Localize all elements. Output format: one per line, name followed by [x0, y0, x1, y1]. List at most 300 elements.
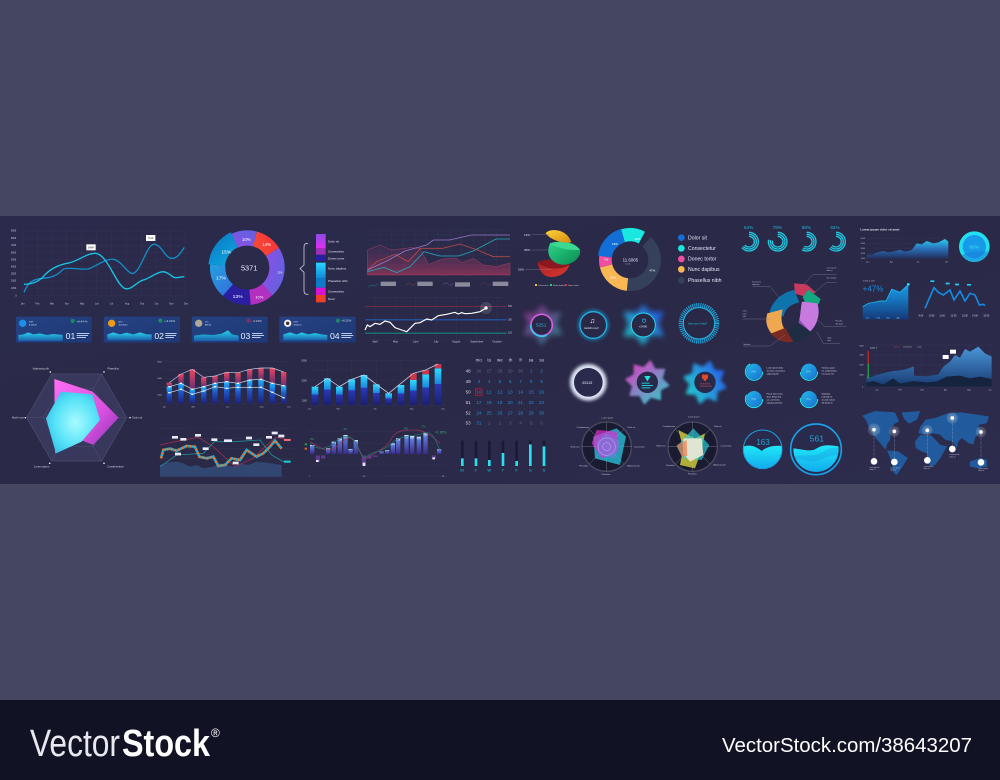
round widget 63115: 63115 [582, 381, 592, 385]
3D ring chart: tortor [743, 312, 747, 315]
info circle 3: diam. Etiam duis [767, 396, 781, 399]
round widget 63115 [570, 364, 607, 401]
line chart with two curves: 7000 [11, 245, 17, 247]
dense area chart: 5000 [859, 365, 865, 367]
donut chart 11.6005: 7% [604, 257, 608, 261]
bar and line mixed chart: 8% [404, 426, 408, 430]
map markers: dolor sit [890, 469, 897, 472]
water gauge 163: 163 [756, 438, 770, 447]
calendar: 31 [476, 421, 482, 426]
map markers: Lorem ipsum [950, 454, 960, 456]
calendar: 26 [476, 368, 482, 373]
round widget music: ♫ [590, 316, 595, 325]
calendar: 30 [518, 368, 523, 373]
3D ring chart: Consectetur [752, 281, 761, 284]
peaks line chart: 10:00 [929, 315, 935, 317]
card 01 XRP: 01 [66, 331, 75, 341]
card 04 ETH [279, 317, 356, 343]
dense area chart: 0 [862, 387, 864, 389]
3D ring chart: Phasellus [835, 321, 843, 323]
calendar: 29 [529, 410, 534, 415]
water gauge 561: 561 [810, 434, 824, 444]
3D sphere pie: Consectetur [538, 284, 549, 287]
dashboard band [0, 216, 1000, 484]
line chart with two curves: 5484 [88, 245, 94, 249]
bar chart blue with line: 5000 [302, 380, 308, 382]
panel: lower right charts [859, 345, 992, 391]
stacked bar chart red and blue [157, 361, 291, 409]
bar chart blue with line: Jan [308, 409, 311, 411]
peaks line chart: 12:00 [951, 315, 957, 317]
radar wheel 1 [571, 417, 645, 476]
card 01 XRP: $ 338.40 [29, 324, 38, 326]
star widget shield [678, 355, 732, 410]
info circle 4 [800, 390, 835, 408]
card 04 ETH: +6.11% [341, 319, 352, 323]
calendar: 25 [487, 410, 492, 415]
dense area chart: +103% [893, 347, 899, 349]
3D sphere pie: Donec tortor [568, 284, 579, 287]
calendar: fr [519, 358, 523, 363]
weekly bar chart: M [460, 468, 464, 473]
info circle 4: Sed porta [822, 393, 831, 396]
white price line chart: June [413, 340, 419, 344]
info circle 4: euismod mi, [822, 397, 833, 399]
calendar: 51 [466, 400, 471, 405]
donut chart 11.6005: 12% [634, 237, 641, 241]
round widget 5251: 5251 [536, 323, 547, 328]
map markers [868, 412, 989, 472]
footer bar [0, 700, 1000, 780]
donut chart 5371 [205, 226, 289, 310]
calendar: 3 [478, 379, 481, 384]
3D ring chart: nibh quam [835, 323, 844, 325]
bar and line mixed chart: 7% [422, 425, 426, 429]
hexagon radar chart: Lorem ipsum [34, 464, 50, 468]
info circle 2: Vivamus quam [822, 368, 835, 370]
calendar: 10 [476, 390, 482, 395]
bar and line mixed chart: 10 [363, 476, 366, 478]
area chart with title: Jul [917, 262, 920, 264]
bar chart blue with line [302, 360, 445, 411]
continents [862, 411, 989, 475]
line chart with two curves: 9000 [11, 231, 17, 233]
line chart with two curves: Dec [184, 304, 189, 306]
info circle 4: 71% [806, 399, 811, 401]
map markers: Lorem ipsum [924, 466, 934, 468]
calendar: 1 [530, 368, 533, 373]
info circle 3: Fusce vitae varius [767, 393, 783, 396]
card 01 XRP [16, 317, 92, 343]
donut chart 5371: 5371 [241, 264, 257, 273]
radar wheel 1: Phasellus [602, 474, 610, 476]
calendar: mo [476, 358, 482, 363]
3D sphere pie: Morbi dapibus [553, 284, 565, 287]
map markers: dolor sit [870, 468, 876, 471]
area chart with title: 5000 [861, 238, 866, 240]
line chart with two curves: Aug [125, 303, 130, 306]
donut chart 11.6005: 23% [610, 275, 616, 279]
round widget music [578, 309, 609, 341]
hexagon radar chart: Morbi non [12, 415, 24, 419]
calendar: we [497, 358, 503, 363]
calendar: su [539, 358, 545, 363]
calendar: 5 [499, 379, 502, 384]
hexagon radar chart: Adipiscing elit [33, 367, 49, 371]
bar chart blue with line: 1000 [302, 400, 308, 402]
calendar: tu [487, 358, 492, 363]
dense area chart: Dollar ▾ [870, 346, 877, 349]
percentage ring 64 [740, 225, 758, 251]
legend with bracket: Consectetur [328, 250, 344, 254]
white price line chart: July [434, 340, 439, 344]
calendar: 15 [529, 390, 534, 395]
line chart with two curves: 5000 [11, 259, 17, 261]
peaks line chart: 13:00 [962, 315, 969, 317]
calendar: 13 [508, 390, 513, 395]
3D ring chart: Donec [743, 311, 748, 313]
calendar: 3 [509, 421, 512, 426]
info circle 3: vulputate pulvinar [767, 402, 783, 405]
calendar: 28 [518, 410, 523, 415]
round widget +2400: +2400 [639, 324, 647, 328]
card 01 XRP: +6.44 % [76, 319, 88, 323]
radar wheel 2: Phasellus [688, 474, 697, 476]
calendar: 6 [509, 379, 512, 384]
info circle 1: 64% [751, 372, 756, 374]
dense area chart: Jan [875, 389, 879, 391]
card 02 BTC [104, 317, 180, 343]
bar and line mixed chart: 4% [343, 427, 348, 431]
bar chart blue with line: Sep [410, 409, 414, 411]
calendar: 4 [519, 421, 522, 426]
info circle 3 [745, 390, 783, 408]
white price line chart: 350 [508, 319, 513, 321]
dense area chart [859, 345, 992, 391]
donut chart 11.6005: Lorem [625, 263, 631, 266]
area chart with title: 1000 [861, 258, 866, 260]
registered mark: ® [211, 726, 220, 740]
panel: lower middle widgets [460, 355, 841, 476]
line chart with two curves: Jan [21, 304, 25, 306]
calendar: 4 [488, 379, 491, 384]
weekly bar chart: S [543, 468, 546, 473]
card 04 ETH: 04 [330, 331, 340, 341]
stacked bar chart red and blue: 1000 [157, 395, 163, 397]
calendar: 30 [539, 410, 544, 415]
area chart with title: Jan [866, 262, 869, 264]
radar wheel 2: Lorem ipsum [688, 415, 700, 418]
bar and line mixed chart [305, 425, 446, 478]
area chart with title: Apr [890, 261, 893, 264]
line chart with two curves: May [80, 304, 85, 306]
peaks line chart: 8:00 [919, 315, 924, 317]
multi line chart [367, 230, 510, 287]
weekly bar chart: T [502, 468, 505, 473]
footer url: VectorStock.com/38643207 [722, 735, 972, 757]
calendar: 23 [539, 400, 544, 405]
percentage ring 62: 62% [830, 225, 840, 230]
percentage ring 58: 58% [802, 225, 811, 230]
dense area chart: May [967, 389, 971, 391]
card 03 LTC [192, 317, 268, 343]
legend with bracket: Dolor sit [328, 239, 339, 243]
round widget +2400 [623, 304, 664, 346]
calendar: 9 [540, 379, 543, 384]
calendar: 48 [466, 368, 471, 373]
area chart +47%: ● 35% ● 12% [863, 281, 875, 283]
3D ring chart: adipiscing [752, 284, 759, 286]
dense area chart: Mar [921, 388, 924, 391]
3D ring chart [743, 267, 847, 346]
card 03 LTC: -2.19% [252, 319, 262, 323]
dense area chart: Feb [898, 389, 903, 391]
line chart with two curves: 2000 [11, 281, 17, 283]
radar wheel 1: Phasellus [579, 466, 588, 468]
bar chart blue with line: Dec [442, 409, 445, 411]
line chart with two curves: 6000 [11, 252, 17, 254]
card 02 BTC: + 9.31% [164, 319, 175, 323]
area chart with title: 2000 [861, 253, 866, 255]
hexagon radar chart [12, 367, 142, 468]
calendar: 14 [518, 390, 523, 395]
bar and line mixed chart: +1.96% [435, 431, 446, 435]
panel: upper middle charts [365, 225, 722, 346]
calendar: th [509, 358, 513, 363]
bar chart blue with line: Mar [337, 408, 340, 411]
water gauge 561 [791, 424, 841, 475]
round widget how can I help: How can I help? [688, 321, 708, 325]
3D sphere pie: 14% [524, 233, 530, 237]
radar wheel 1: Adipiscing elit [627, 465, 640, 468]
legend with bracket: Phasellus nibh [328, 279, 348, 283]
white price line chart: April [372, 340, 378, 344]
weekly bar chart [460, 441, 546, 473]
area chart with title: Lorem ipsum dolor sit amet [860, 227, 899, 231]
3D ring chart: nibh [743, 316, 746, 318]
card 04 ETH: ETH [294, 321, 298, 323]
map markers: dolor sit [924, 467, 930, 470]
line chart with two curves: Jul [110, 304, 113, 306]
percentage ring 58 [797, 225, 816, 251]
line chart with two curves: 0 [15, 295, 17, 297]
area chart with title: Dec [945, 262, 949, 264]
percentage ring 78 [768, 225, 787, 251]
radar wheel 1: Morbi non [571, 446, 579, 449]
calendar: 19 [497, 400, 503, 405]
map markers: Lorem ipsum [870, 467, 880, 469]
donut legend: Dolor sit [688, 235, 707, 241]
donut chart 11.6005: 47% [649, 269, 656, 273]
peaks line chart [919, 280, 990, 317]
candlestick chart [160, 428, 293, 477]
card 02 BTC: BTC [119, 321, 123, 323]
calendar: 20 [508, 400, 513, 405]
3D ring chart: dolor sit [827, 269, 833, 272]
weekly bar chart: S [529, 468, 532, 473]
legend with bracket [300, 234, 348, 302]
star widget triangle [622, 357, 673, 408]
donut legend: Phasellus nibh [688, 278, 722, 284]
gauge circle 60%: 60% [969, 245, 980, 251]
weekly bar chart: F [515, 468, 518, 473]
calendar: 28 [497, 368, 503, 373]
3D ring chart: Sed porta [743, 343, 751, 346]
round widget 5251 [523, 304, 563, 346]
calendar: 27 [487, 368, 492, 373]
calendar: 6 [540, 421, 543, 426]
donut chart 11.6005 [595, 225, 665, 295]
dense area chart: 3000 [859, 375, 865, 377]
donut chart 11.6005: 18% [612, 242, 618, 246]
calendar: 7 [519, 379, 522, 384]
calendar: 1 [488, 421, 491, 426]
3D sphere pie: 35% [524, 248, 530, 252]
panel: upper left charts [11, 226, 356, 343]
donut legend [678, 234, 722, 284]
white price line chart: 150 [508, 333, 513, 335]
calendar: 2 [540, 368, 543, 373]
3D ring chart: dolor [827, 340, 831, 342]
legend with bracket: Nunc [328, 297, 335, 301]
radar wheel 2: Consectetur [721, 444, 732, 447]
card 04 ETH: $ 846.12 [294, 324, 301, 326]
area chart +47%: Feb [877, 317, 881, 319]
info circle 2: 56% [806, 372, 811, 374]
weekly bar chart: T [475, 468, 478, 473]
info circle 2: mi, condimentum [822, 370, 837, 373]
line chart with two curves: Oct [155, 303, 159, 306]
card 01 XRP: XRP [29, 321, 34, 323]
stacked bar chart red and blue: 9000 [157, 361, 163, 363]
calendar: 12 [497, 390, 503, 395]
dense area chart: Jun [989, 389, 992, 391]
donut chart 5371: 21% [277, 271, 283, 275]
donut legend: Donec tortor [688, 257, 717, 263]
calendar: 49 [466, 379, 471, 384]
world map [862, 411, 989, 475]
radar wheel 2: Condimentum [663, 425, 675, 428]
dense area chart: Last [917, 346, 922, 349]
percentage ring 64: 64% [744, 225, 753, 230]
white price line chart: September [470, 340, 483, 344]
hexagon radar chart: Condimentum [107, 464, 125, 468]
info circle 4: elit dictum in [822, 402, 833, 405]
info circle 3: arcu vel metus [767, 399, 780, 402]
calendar: 53 [466, 421, 471, 426]
info circle 1: sit amet, consectetur [767, 370, 785, 373]
card 03 LTC: LTC [205, 321, 209, 323]
hexagon radar chart: Dolor sit [132, 415, 142, 419]
calendar: sa [529, 358, 534, 363]
line chart with two curves: Feb [35, 304, 40, 306]
calendar: 16 [539, 390, 544, 395]
footer logo: Vector [30, 723, 120, 765]
radar wheel 2: Dolor sit [714, 425, 722, 428]
white price line chart: August [452, 340, 461, 344]
calendar: 24 [476, 410, 482, 415]
info circle 4: sit amet rutrum [822, 399, 835, 402]
area chart with title: 3000 [861, 248, 866, 250]
panel: lower left charts [12, 360, 446, 478]
white price line chart: 500 [508, 306, 513, 308]
radar wheel 1: Condimentum [577, 426, 589, 429]
calendar: 18 [487, 400, 492, 405]
card 02 BTC: 02 [154, 331, 164, 341]
line chart with two curves: 7114 [148, 236, 154, 240]
3D sphere pie [518, 230, 580, 287]
donut chart 5371: 14% [262, 242, 271, 247]
round widget how can I help [681, 305, 717, 341]
bar and line mixed chart: 1 [309, 476, 310, 478]
card 03 LTC: 03 [241, 331, 250, 341]
radar wheel 1: Dolor sit [628, 426, 635, 429]
calendar: 2 [499, 421, 502, 426]
legend with bracket: Donec tortor [328, 256, 344, 260]
bar and line mixed chart: 23 [442, 476, 445, 478]
line chart with two curves: 4000 [11, 267, 17, 269]
radar wheel 2 [657, 415, 732, 476]
map markers: Lorem ipsum [978, 468, 989, 470]
gauge circle 60% [959, 231, 990, 262]
line chart with two curves: 8000 [11, 238, 17, 240]
donut chart 5371: 17% [216, 275, 227, 281]
stacked bar chart red and blue: Jan [163, 407, 166, 409]
3D ring chart: Nunc dapibus [827, 277, 837, 279]
radar wheel 1: Lorem ipsum [602, 417, 613, 420]
dense area chart: 7000 [859, 355, 865, 357]
calendar: 11 [487, 390, 492, 395]
peaks line chart: 15:00 [983, 315, 990, 317]
dense area chart: Dominant [903, 346, 912, 349]
white price line chart: October [492, 340, 502, 344]
white price line chart: May [393, 340, 399, 344]
footer logo bold word: Stock [122, 723, 211, 765]
map markers: Lorem ipsum [890, 468, 901, 470]
line chart with two curves: Sep [140, 304, 145, 306]
legend with bracket: Nunc dapibus [328, 267, 347, 271]
stacked bar chart red and blue: Jun [226, 407, 229, 409]
round widget music: track01.mp3 [584, 326, 599, 330]
calendar: 27 [508, 410, 513, 415]
calendar: 52 [466, 410, 471, 415]
calendar: 5 [530, 421, 533, 426]
percentage ring 62 [827, 225, 845, 251]
info circle 3: 37% [751, 399, 756, 401]
donut chart 11.6005: 11.6005 [623, 257, 639, 262]
area chart +47%: Apr [897, 316, 900, 319]
bar chart blue with line: 9000 [302, 360, 308, 362]
3D sphere pie: 51% [518, 267, 524, 271]
calendar [466, 358, 545, 426]
radar wheel 1: Consectetur [634, 446, 645, 449]
calendar: 8 [530, 379, 533, 384]
3D ring chart: Lorem ipsum [827, 267, 837, 269]
line chart with two curves [11, 231, 189, 306]
stacked bar chart red and blue: Dec [287, 407, 291, 409]
line chart with two curves: Jun [95, 304, 99, 306]
area chart +47%: Jan [866, 317, 869, 319]
line chart with two curves: Nov [169, 304, 174, 306]
panel: upper right charts [740, 225, 990, 346]
calendar: 29 [508, 368, 513, 373]
donut chart 5371: 10% [242, 237, 251, 242]
bar chart blue with line: Jun [373, 409, 377, 411]
line chart with two curves: Mar [50, 303, 54, 306]
dense area chart: Apr [944, 388, 947, 391]
info circle 1: Lorem ipsum dolor [767, 367, 783, 370]
legend with bracket: Consectetur [328, 289, 344, 293]
